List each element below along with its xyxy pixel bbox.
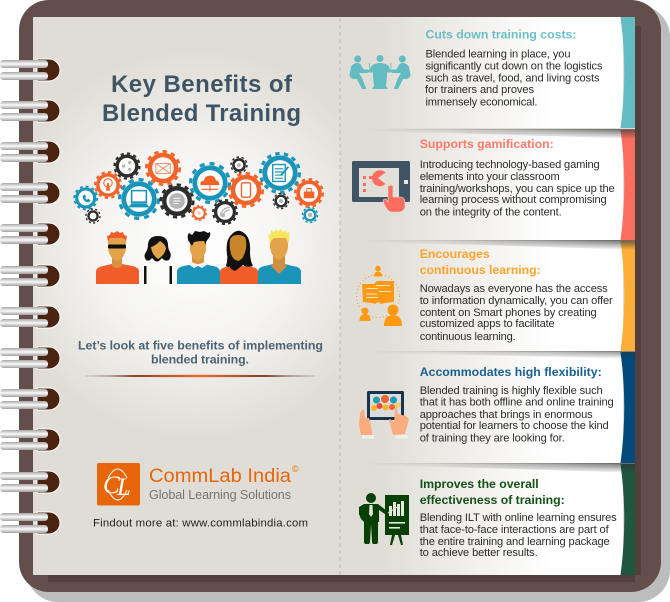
gear: search bbox=[192, 206, 206, 220]
title: Key Benefits of bbox=[111, 71, 293, 98]
body text: learning process without compromising bbox=[420, 194, 607, 206]
gear: star bbox=[302, 207, 318, 223]
panel: accommodates high flexibility bbox=[359, 351, 635, 463]
gear: share bbox=[114, 153, 140, 179]
person: man in blue shirt bbox=[177, 231, 220, 284]
person: blond man bbox=[258, 229, 301, 284]
body text: customized apps to facilitate bbox=[420, 318, 555, 330]
gear: chat bbox=[161, 185, 193, 217]
spiral binding rings bbox=[0, 59, 60, 534]
body text: continuous learning. bbox=[420, 331, 516, 343]
icon: chat network bbox=[356, 266, 402, 326]
body text: that face-to-face interactions are part of bbox=[420, 524, 610, 536]
heading: continuous learning: bbox=[420, 263, 541, 277]
body text: Blended training is highly flexible such bbox=[420, 385, 603, 397]
body text: to information dynamically, you can offer bbox=[420, 295, 613, 307]
panel: cuts down training costs bbox=[350, 17, 635, 128]
divider rule bbox=[85, 375, 315, 377]
body text bbox=[420, 385, 614, 444]
logo mark bbox=[97, 463, 140, 506]
gear: small dark top bbox=[231, 157, 247, 173]
body text: Blending ILT with online learning ensures bbox=[420, 512, 617, 524]
gear: antenna bbox=[95, 172, 121, 198]
body text: that it has both offline and online training bbox=[420, 396, 614, 408]
website link text: Findout more at: www.commlabindia.com bbox=[93, 518, 308, 530]
heading: effectiveness of training: bbox=[420, 493, 565, 507]
tab: orange bbox=[620, 241, 635, 351]
heading bbox=[420, 477, 565, 507]
logo mark: L bbox=[116, 474, 131, 501]
body text bbox=[420, 159, 615, 218]
body text: Blended learning in place, you bbox=[426, 48, 570, 60]
body text: immensely economical. bbox=[426, 96, 538, 108]
heading: Cuts down training costs: bbox=[426, 28, 576, 42]
body text: Nowadays as everyone has the access bbox=[420, 283, 608, 295]
gear: notes bbox=[261, 154, 299, 192]
body text: of training they are looking for. bbox=[420, 432, 565, 444]
body text: such as travel, food, and living costs bbox=[426, 72, 600, 84]
intro text: blended training. bbox=[151, 352, 249, 366]
body text bbox=[420, 512, 617, 559]
logo mark: C bbox=[103, 472, 120, 499]
body text: approaches that brings in enormous bbox=[420, 409, 593, 421]
person: woman with black hair bbox=[144, 236, 172, 284]
copyright sign: © bbox=[292, 464, 299, 474]
gear: phone bbox=[74, 187, 97, 209]
gear: small dark left bbox=[86, 209, 100, 223]
panel: improves overall effectiveness bbox=[359, 463, 635, 575]
icon: meeting bbox=[350, 55, 410, 89]
icon: tablet in hands bbox=[359, 391, 409, 438]
heading: Accommodates high flexibility: bbox=[420, 365, 602, 379]
panel: encourages continuous learning bbox=[356, 240, 635, 351]
tab: coral bbox=[620, 130, 635, 240]
heading: Improves the overall bbox=[420, 477, 539, 491]
panel: supports gamification bbox=[352, 129, 635, 240]
title bbox=[102, 71, 301, 127]
icon: presenter bbox=[359, 493, 409, 545]
logo name: CommLab India bbox=[149, 466, 291, 487]
body text: training/workshops, you can spice up the bbox=[420, 183, 615, 195]
intro text bbox=[78, 338, 323, 366]
body text: significantly cut down on the logistics bbox=[426, 60, 603, 72]
heading: Supports gamification: bbox=[420, 137, 554, 151]
gear: smartphone bbox=[229, 173, 263, 207]
gear: mail bbox=[146, 151, 180, 185]
gear: wifi bbox=[213, 200, 237, 224]
tab: navy bbox=[620, 352, 635, 463]
body text: on the integrity of the content. bbox=[420, 206, 562, 218]
logo bbox=[97, 463, 299, 506]
logo tagline: Global Learning Solutions bbox=[149, 488, 291, 502]
body text: elements into your classroom bbox=[420, 171, 560, 183]
gear: small dark right bbox=[273, 193, 289, 209]
intro text: Let’s look at five benefits of implementing bbox=[78, 338, 323, 352]
person: woman in orange bbox=[220, 231, 258, 284]
body text: content on Smart phones by creating bbox=[420, 307, 597, 319]
body text: for trainers and proves bbox=[425, 84, 534, 96]
body text bbox=[425, 48, 603, 108]
title: Blended Training bbox=[102, 100, 301, 127]
heading bbox=[420, 247, 541, 277]
gears cluster bbox=[74, 151, 323, 224]
gear: cloud bbox=[191, 164, 229, 202]
body text: the entire training and learning package bbox=[420, 536, 610, 548]
heading: Encourages bbox=[420, 247, 490, 261]
page fold dashed line bbox=[339, 18, 341, 575]
tab: teal bbox=[620, 17, 635, 128]
body text: potential for learners to choose the kind bbox=[420, 420, 609, 432]
body text: to achieve better results. bbox=[420, 547, 538, 559]
tab: green bbox=[620, 464, 635, 575]
body text bbox=[420, 283, 613, 343]
icon: tablet game bbox=[352, 161, 410, 212]
gear: laptop bbox=[120, 180, 158, 218]
person: man with sunglasses bbox=[96, 231, 139, 284]
body text: Introducing technology-based gaming bbox=[420, 159, 600, 171]
left page background bbox=[33, 17, 340, 575]
gear: basket bbox=[295, 179, 323, 207]
people group bbox=[96, 229, 301, 284]
